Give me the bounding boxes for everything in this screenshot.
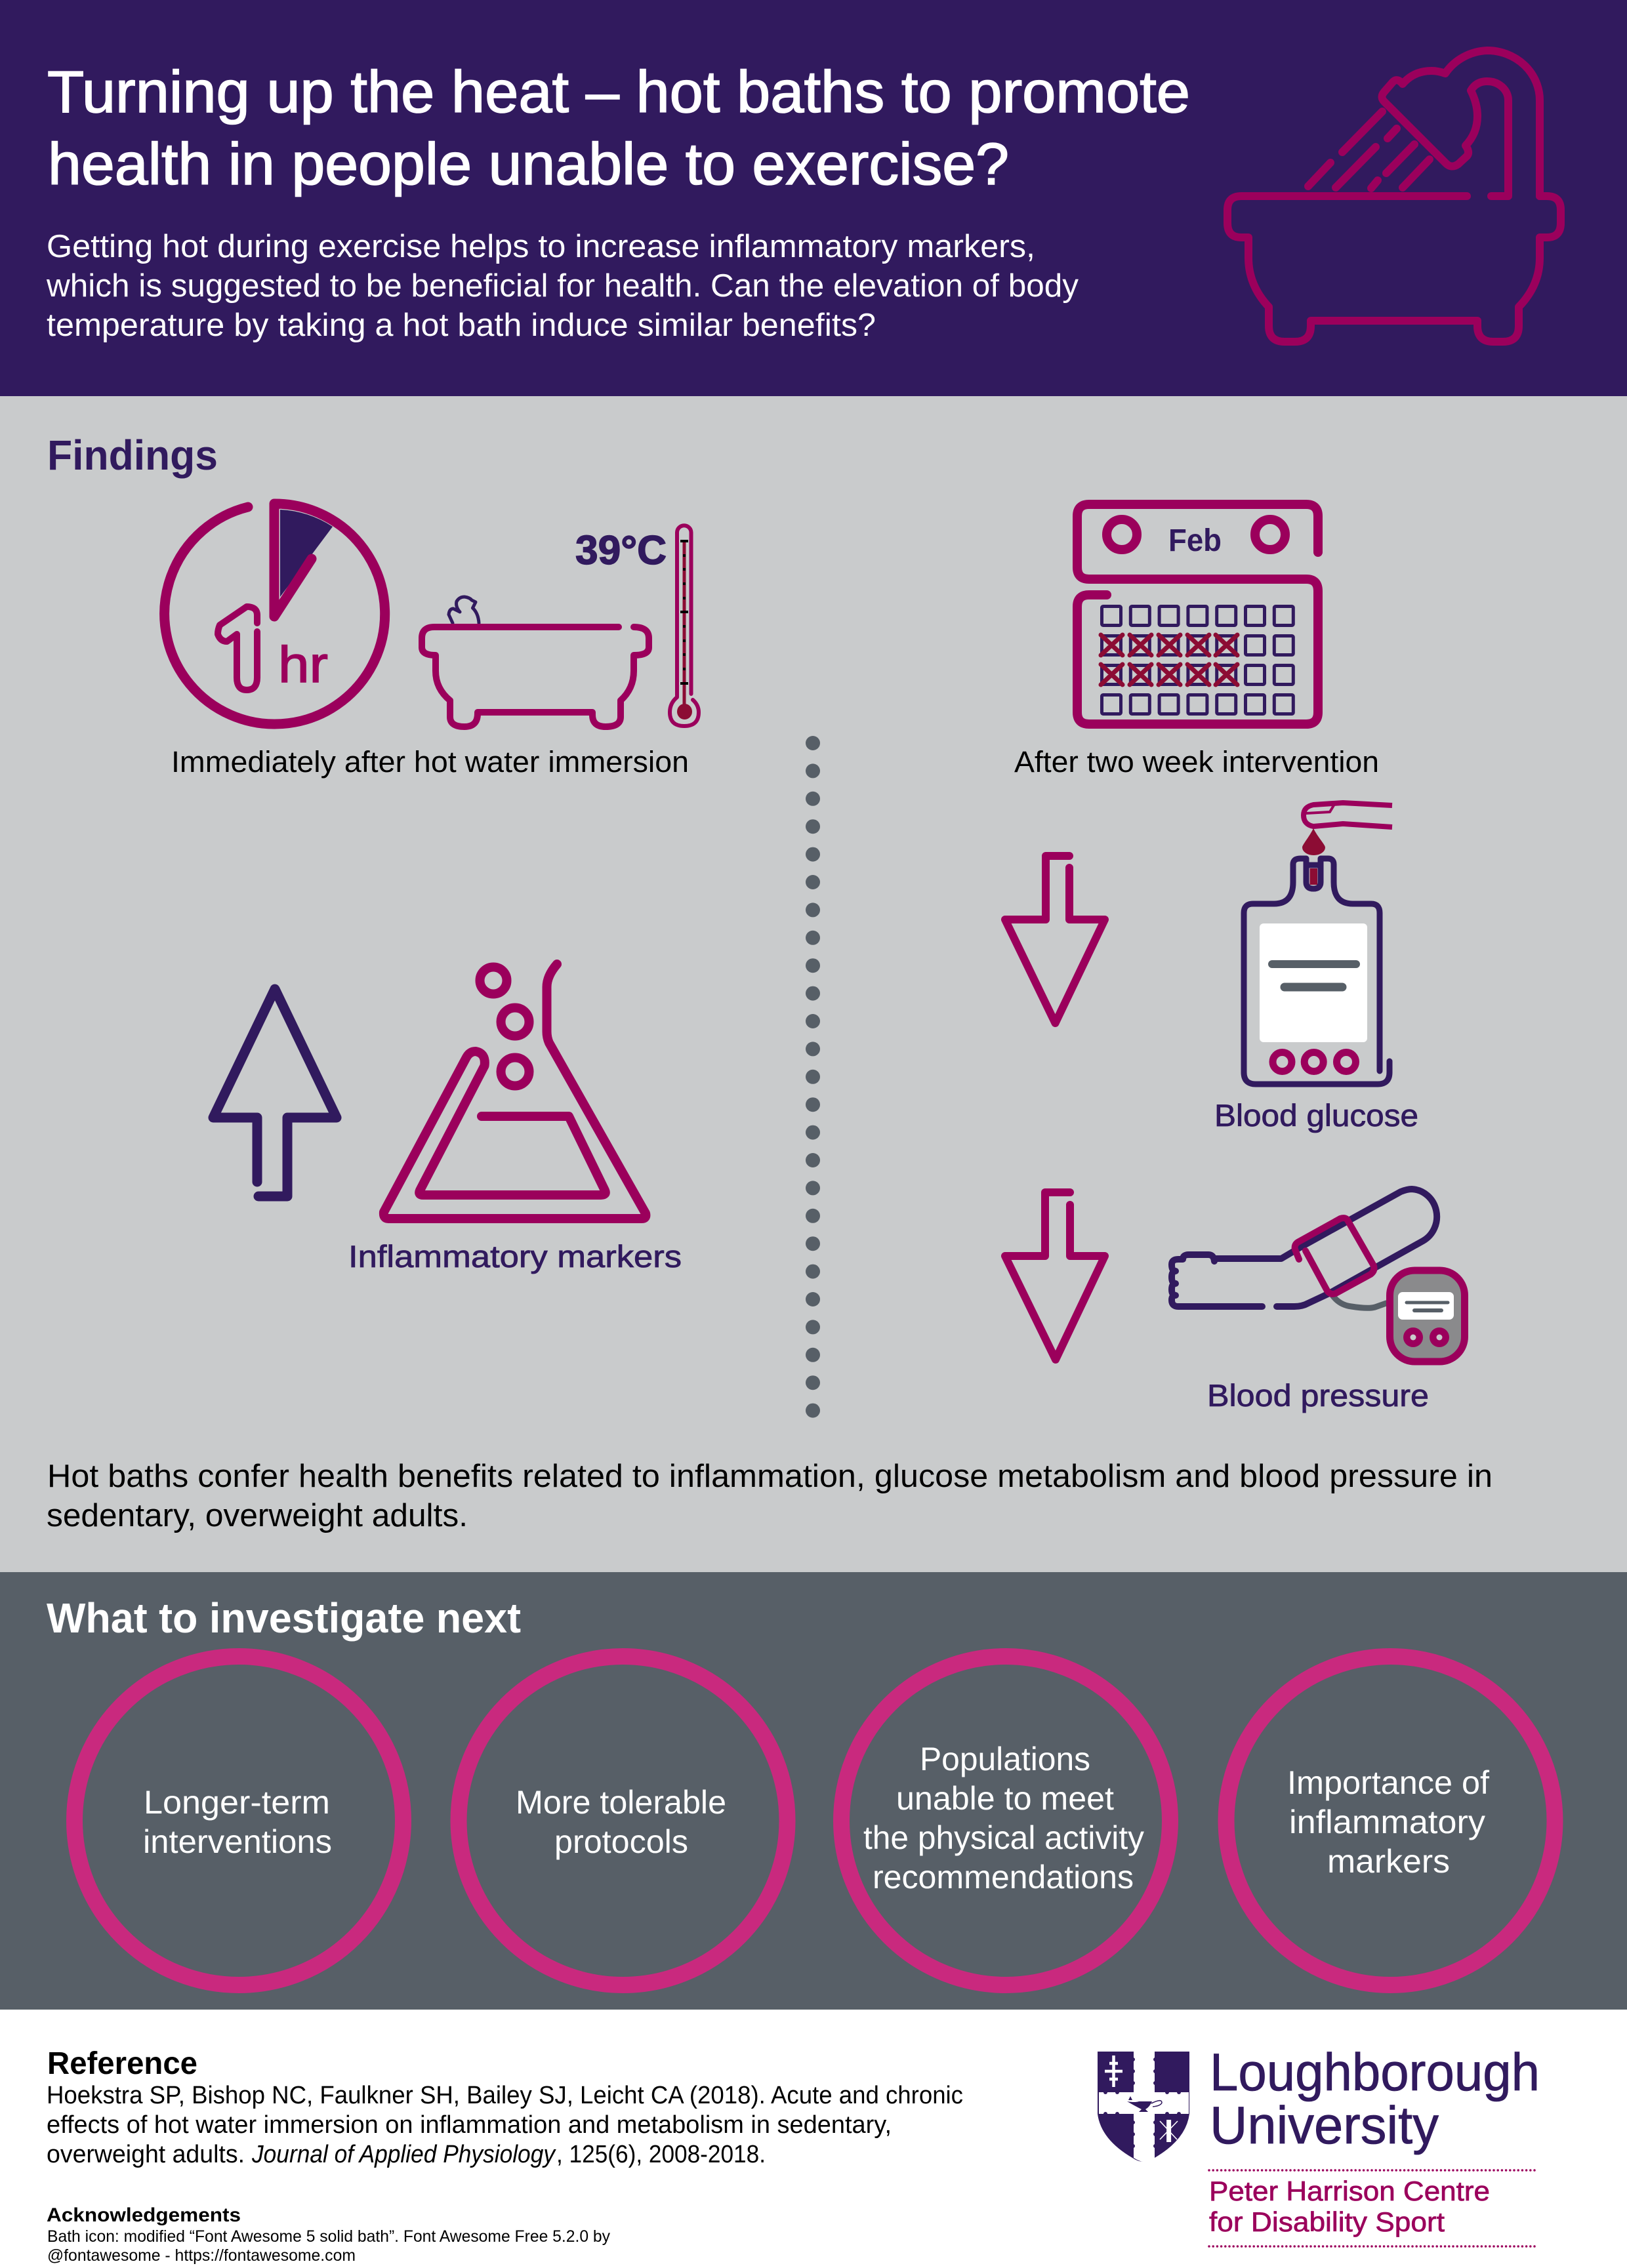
heading: acknowledgements: Acknowledgements [47, 2204, 241, 2226]
circle: longer-term interventions [75, 1657, 403, 1985]
circle: importance of inflammatory markers: inflammatory [1289, 1804, 1485, 1840]
intro text: temperature by taking a hot bath induce similar benefits? [47, 308, 876, 343]
text: summary: sedentary, overweight adults. [47, 1498, 468, 1533]
icon: bath with duck [422, 597, 649, 727]
panel: footer [0, 2010, 1627, 2268]
label: immediately after: Immediately after hot water immersion [171, 745, 689, 779]
label: inflammatory markers: Inflammatory markers [348, 1239, 682, 1274]
icon: one hour clock [165, 504, 385, 724]
icon: thermometer [670, 525, 699, 726]
text: citation: Journal of Applied Physiology [251, 2141, 556, 2168]
circle: populations unable to meet recommendations: the physical activity [863, 1819, 1144, 1856]
circle: importance of inflammatory markers: Importance of [1287, 1764, 1489, 1801]
logo: university name [1210, 2043, 1540, 2155]
label: blood pressure: Blood pressure [1207, 1378, 1429, 1413]
text: citation: effects of hot water immersion on inflammation and metabolism in sedentary, [47, 2111, 892, 2139]
logo: university shield [1098, 2052, 1189, 2162]
text: citation: , 125(6), 2008-2018. [556, 2141, 766, 2168]
title [47, 60, 1190, 197]
icon: glucose meter [1244, 803, 1392, 1084]
text: citation: Hoekstra SP, Bishop NC, Faulkner SH, Bailey SJ, Leicht CA (2018). Acute and chronic [47, 2082, 963, 2109]
icon: flask with bubbles [384, 964, 646, 1219]
icon: calendar: Feb [1168, 523, 1222, 558]
icon: calendar [1077, 504, 1318, 724]
title: health in people unable to exercise? [48, 132, 1009, 197]
heading: reference: Reference [47, 2046, 197, 2081]
text: summary: Hot baths confer health benefits related to inflammation, glucose metabolism and blood pressure in [47, 1459, 1493, 1494]
circle: more tolerable protocols: protocols [554, 1823, 688, 1860]
panel: what to investigate next [0, 1572, 1627, 2010]
text: acknowledgement details: Bath icon: modified “Font Awesome 5 solid bath”. Font Awesome Free 5.2.0 by [47, 2227, 610, 2246]
arrow: up, inflammatory markers [213, 989, 337, 1196]
heading: what to investigate next: What to investigate next [47, 1594, 521, 1642]
intro text [46, 229, 1079, 343]
text: summary [47, 1459, 1493, 1533]
heading: findings: Findings [47, 432, 218, 479]
icon: one hour clock: hr [278, 636, 328, 693]
logo: peter harrison centre: for Disability Sport [1209, 2206, 1445, 2237]
text: citation [47, 2082, 963, 2168]
icon: blood pressure arm and monitor [1172, 1189, 1464, 1362]
intro text: Getting hot during exercise helps to increase inflammatory markers, [47, 229, 1035, 264]
circle: more tolerable protocols [459, 1657, 787, 1985]
icon: bath with shower [1227, 51, 1561, 342]
label: 39°C: 39°C [575, 528, 667, 573]
circle: populations unable to meet recommendations [841, 1657, 1170, 1985]
text: acknowledgement details [47, 2227, 610, 2265]
label: after two week intervention: After two week intervention [1014, 745, 1379, 779]
title: Turning up the heat – hot baths to promote [47, 60, 1190, 125]
text: citation: overweight adults. [47, 2141, 245, 2168]
logo: peter harrison centre [1209, 2170, 1537, 2246]
circle: populations unable to meet recommendations: recommendations [873, 1859, 1134, 1895]
circle: more tolerable protocols: More tolerable [516, 1784, 726, 1821]
logo: peter harrison centre: Peter Harrison Centre [1209, 2176, 1490, 2206]
arrow: down, blood pressure [1005, 1192, 1105, 1360]
text: acknowledgement details: @fontawesome - https://fontawesome.com [47, 2246, 356, 2265]
circle: populations unable to meet recommendations: unable to meet [896, 1780, 1114, 1817]
intro text: which is suggested to be beneficial for health. Can the elevation of body [46, 268, 1079, 304]
panel: header [0, 0, 1627, 396]
panel: findings [0, 396, 1627, 1572]
circle: importance of inflammatory markers [1226, 1657, 1555, 1985]
circle: longer-term interventions: Longer-term [144, 1784, 330, 1821]
label: blood glucose: Blood glucose [1214, 1098, 1418, 1133]
arrow: down, blood glucose [1005, 856, 1105, 1023]
logo: university name: University [1210, 2096, 1439, 2155]
circle: populations unable to meet recommendations: Populations [920, 1741, 1090, 1777]
logo: university name: Loughborough [1210, 2043, 1540, 2102]
circle: importance of inflammatory markers: markers [1327, 1843, 1450, 1880]
circle: longer-term interventions: interventions [143, 1823, 332, 1860]
